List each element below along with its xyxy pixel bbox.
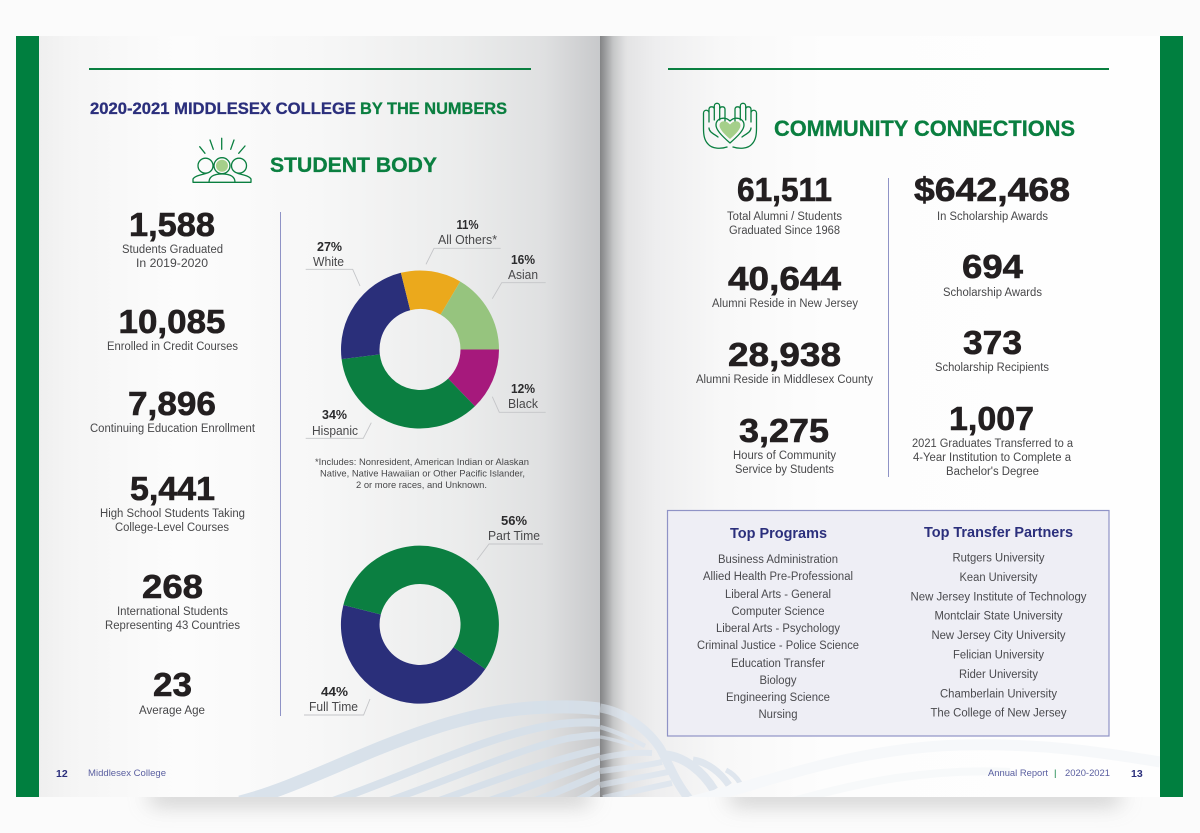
top transfer partners list: Rutgers University	[952, 552, 1045, 564]
top transfer partners list: New Jersey City University	[932, 630, 1066, 642]
top rule left	[89, 68, 531, 70]
icon: students group	[193, 138, 251, 182]
stat: international students: 268	[142, 568, 203, 605]
stat: scholarship dollars	[914, 171, 1070, 223]
top programs list: Business Administration	[718, 554, 838, 566]
stat: graduates transferred: 4-Year Institution to Complete a	[913, 452, 1072, 464]
stat: international students: Representing 43 Countries	[105, 620, 240, 632]
stat: community service hours: Hours of Community	[733, 450, 836, 462]
top transfer partners list: Chamberlain University	[940, 688, 1057, 700]
heading: community connections: COMMUNITY CONNECTIONS	[774, 116, 1075, 141]
stat: credit courses: 10,085	[118, 303, 226, 340]
stat: graduates transferred: 1,007	[949, 400, 1034, 437]
footer right: |	[1054, 768, 1056, 779]
left spine bar	[16, 36, 39, 797]
top transfer partners list: Felician University	[953, 650, 1044, 662]
footnote: Native, Native Hawaiian or Other Pacific Islander,	[320, 468, 525, 480]
label: white: 27%	[317, 239, 342, 254]
top programs list: Liberal Arts - Psychology	[716, 623, 840, 635]
shadow beneath right page	[730, 788, 1120, 804]
title: 2020-2021 MIDDLESEX COLLEGE	[90, 99, 356, 118]
title	[90, 99, 507, 118]
stat: students graduated: Students Graduated	[122, 244, 223, 256]
stat: total alumni: Graduated Since 1968	[729, 225, 840, 237]
stat: high school students: 5,441	[130, 470, 215, 507]
label: full time: 44%	[321, 684, 348, 699]
top programs list: Criminal Justice - Police Science	[697, 640, 859, 652]
stat: graduates transferred	[912, 400, 1074, 478]
label: hispanic: Hispanic	[312, 424, 358, 438]
top transfer partners list: Rider University	[959, 669, 1038, 681]
stat: scholarship awards	[943, 248, 1042, 299]
stat: continuing education: Continuing Education Enrollment	[90, 423, 256, 435]
top transfer partners list	[910, 524, 1087, 720]
stat: community service hours	[733, 412, 836, 476]
stat: alumni in middlesex: Alumni Reside in Middlesex County	[696, 374, 873, 386]
top transfer partners list: New Jersey Institute of Technology	[910, 591, 1087, 603]
wave decoration: right page	[600, 704, 742, 797]
top transfer partners list: Kean University	[960, 572, 1038, 584]
stat: alumni in middlesex	[696, 336, 873, 386]
title: BY THE NUMBERS	[360, 99, 507, 118]
stat: high school students: High School Students Taking	[100, 508, 245, 520]
stat: total alumni	[727, 171, 842, 237]
stat: average age: Average Age	[139, 705, 205, 717]
footnote: 2 or more races, and Unknown.	[356, 480, 487, 491]
top programs list	[697, 525, 859, 721]
stat: students graduated: 1,588	[129, 206, 215, 243]
stat: high school students: College-Level Courses	[115, 522, 229, 534]
label: full time	[304, 684, 370, 715]
stat: total alumni: 61,511	[737, 171, 832, 208]
label: hispanic	[306, 407, 371, 438]
stat: continuing education	[90, 385, 256, 435]
stat: scholarship dollars: In Scholarship Awards	[937, 211, 1048, 223]
top programs list: Education Transfer	[731, 658, 825, 670]
stat: community service hours: Service by Students	[735, 464, 834, 476]
footer right: Annual Report	[988, 768, 1048, 779]
label: all others: 11%	[456, 217, 479, 232]
stat: total alumni: Total Alumni / Students	[727, 211, 842, 223]
stat: scholarship dollars: $642,468	[914, 171, 1070, 208]
footer left: 12	[56, 768, 68, 780]
shadow beneath left page	[150, 788, 590, 804]
top transfer partners list: The College of New Jersey	[930, 708, 1067, 720]
stat: graduates transferred: Bachelor's Degree	[946, 466, 1039, 478]
top transfer partners list: Top Transfer Partners	[924, 524, 1073, 541]
stat: continuing education: 7,896	[128, 385, 216, 422]
right spine bar	[1160, 36, 1183, 797]
stat: high school students	[100, 470, 245, 534]
footnote: *Includes: Nonresident, American Indian or Alaskan	[315, 457, 529, 468]
stat: scholarship recipients	[935, 324, 1049, 374]
top programs list: Nursing	[758, 709, 798, 721]
stat: scholarship recipients: 373	[963, 324, 1022, 361]
footer left	[56, 768, 166, 780]
stat: average age	[139, 666, 205, 717]
panel: top programs and partners	[668, 510, 1109, 736]
column divider right	[888, 178, 889, 477]
label: asian: Asian	[508, 268, 538, 282]
footnote	[315, 457, 529, 491]
label: asian: 16%	[511, 252, 535, 267]
label: all others: All Others*	[438, 233, 497, 247]
stat: credit courses: Enrolled in Credit Courses	[107, 341, 238, 353]
stat: students graduated	[122, 206, 223, 270]
right page sheet	[600, 36, 1160, 797]
stat: scholarship awards: 694	[962, 248, 1024, 285]
heading: student body: STUDENT BODY	[270, 154, 437, 177]
stat: community service hours: 3,275	[739, 412, 829, 449]
label: part time	[477, 513, 543, 560]
top rule right	[668, 68, 1109, 70]
footer right: 13	[1131, 768, 1143, 780]
top programs list: Engineering Science	[726, 692, 830, 704]
label: asian	[492, 252, 546, 299]
wave decoration: left page	[240, 707, 600, 802]
label: black	[492, 381, 546, 412]
stat: alumni in new jersey: 40,644	[728, 260, 842, 297]
stat: scholarship recipients: Scholarship Recipients	[935, 362, 1049, 374]
label: black: 12%	[511, 381, 535, 396]
chart: enrollment status donut	[341, 546, 499, 704]
stat: scholarship awards: Scholarship Awards	[943, 287, 1042, 299]
icon: hands with heart	[704, 103, 756, 148]
label: white	[306, 239, 360, 286]
top programs list: Allied Health Pre-Professional	[703, 571, 853, 583]
label: full time: Full Time	[309, 700, 358, 714]
label: black: Black	[508, 397, 539, 411]
stat: students graduated: In 2019-2020	[136, 258, 208, 270]
stat: graduates transferred: 2021 Graduates Transferred to a	[912, 438, 1074, 450]
stat: credit courses	[107, 303, 238, 353]
chart: ethnicity donut	[341, 270, 499, 428]
stat: alumni in middlesex: 28,938	[728, 336, 841, 373]
footer right	[988, 768, 1143, 780]
label: white: White	[313, 255, 344, 269]
stat: international students	[105, 568, 240, 632]
left page sheet	[39, 36, 600, 797]
stat: average age: 23	[153, 666, 192, 703]
label: all others	[426, 217, 501, 264]
label: hispanic: 34%	[322, 407, 347, 422]
stat: international students: International Students	[117, 606, 228, 618]
gutter shadow	[600, 36, 625, 797]
top programs list: Liberal Arts - General	[725, 589, 831, 601]
stat: alumni in new jersey	[712, 260, 858, 310]
top programs list: Biology	[760, 675, 797, 687]
top transfer partners list: Montclair State University	[934, 611, 1063, 623]
top programs list: Computer Science	[732, 606, 824, 618]
footer left: Middlesex College	[88, 768, 166, 779]
stat: alumni in new jersey: Alumni Reside in New Jersey	[712, 298, 858, 310]
column divider left	[280, 212, 281, 716]
label: part time: Part Time	[488, 529, 540, 543]
top programs list: Top Programs	[730, 525, 827, 542]
footer right: 2020-2021	[1065, 768, 1110, 779]
label: part time: 56%	[501, 513, 527, 528]
